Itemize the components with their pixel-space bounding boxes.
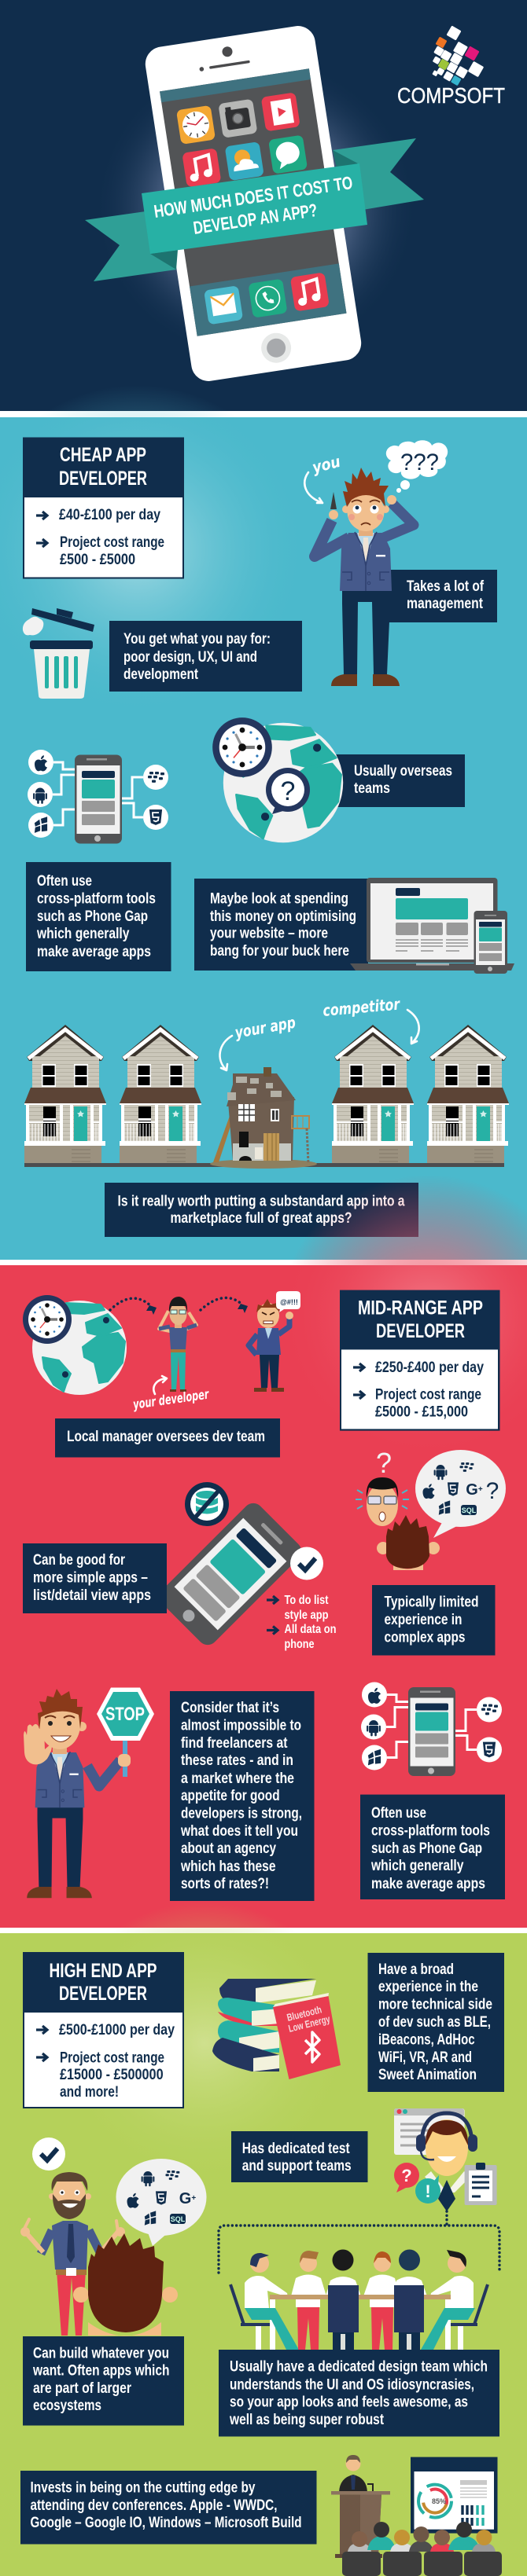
character: support agent <box>394 2108 497 2211</box>
logo: Compsoft: COMPSOFT <box>397 83 505 108</box>
icon: globe with clock and question: ? <box>281 776 295 806</box>
list: to do list style app: To do list <box>285 1594 329 1607</box>
callout: typically limited experience: complex apps <box>384 1628 466 1646</box>
heading <box>59 444 147 490</box>
callout: often use cross-platform tools: make average apps <box>37 943 151 960</box>
callout: can build whatever you want: are part of larger <box>33 2380 131 2397</box>
ribbon title text: DEVELOP AN APP? <box>192 200 319 238</box>
callout: typically limited experience <box>372 1585 496 1655</box>
ribbon title text <box>153 172 354 238</box>
icon: laptop and phone <box>350 878 514 974</box>
presentation screen: 85% <box>432 2497 446 2505</box>
rate list: £40-£100 per day <box>59 506 160 523</box>
callout: can build whatever you want: want. Often apps which <box>32 2361 170 2379</box>
callout: takes a lot of management: management <box>407 595 483 612</box>
callout: have a broad experience: more technical side <box>378 1996 492 2013</box>
callout: you get what you pay for <box>109 621 302 692</box>
callout: consider freelancer rates: developers is strong, <box>181 1804 302 1822</box>
callout: typically limited experience: Typically limited <box>384 1594 478 1611</box>
character: support agent: ? <box>401 2166 412 2185</box>
callout: often use cross-platform tools: such as Phone Gap <box>371 1840 482 1857</box>
ribbon banner <box>85 138 424 281</box>
dotted arrow to developer <box>110 1298 157 1315</box>
character: confused developer with speech bubble: ? <box>376 1447 392 1479</box>
callout: often use cross-platform tools: which generally <box>36 925 130 942</box>
raised hand <box>24 1724 52 1764</box>
callout: often use cross-platform tools: such as Phone Gap <box>37 908 148 925</box>
callout: typically limited experience: experience in <box>384 1611 463 1628</box>
callout: can be good for simple apps: list/detail view apps <box>33 1587 151 1604</box>
card: cheap app developer <box>23 437 184 578</box>
callout: local manager oversees dev team: Local manager oversees dev team <box>67 1428 265 1445</box>
hand lettering: your app <box>220 1013 297 1070</box>
callout: have a broad experience: Have a broad <box>378 1961 454 1978</box>
speech bubble with tech icons: SQL <box>171 2215 186 2223</box>
callout: invests in dev conferences <box>20 2471 316 2545</box>
logo: Compsoft <box>397 25 505 108</box>
list: to do list style app: style app <box>285 1609 329 1622</box>
callout: can build whatever you want <box>23 2336 184 2425</box>
callout: is it really worth <box>105 1183 418 1237</box>
callout: usually overseas teams: teams <box>354 780 390 797</box>
callout: often use cross-platform tools <box>360 1795 505 1899</box>
icon: smartphone illustration <box>143 24 363 383</box>
rate list: Project cost range <box>60 534 164 551</box>
callout: have a broad experience <box>368 1953 504 2092</box>
callout: consider freelancer rates: sorts of rates?! <box>181 1875 269 1892</box>
icon: trash can <box>23 608 94 699</box>
rate list: £500-£1000 per day <box>59 2021 175 2038</box>
callout: often use cross-platform tools: Often use <box>371 1804 426 1822</box>
speech bubble with tech icons: G <box>179 2190 191 2207</box>
panel: high end app developer section <box>0 1902 527 2576</box>
speech bubble with tech icons <box>116 2159 206 2246</box>
heading: DEVELOPER <box>59 1983 147 2005</box>
callout: consider freelancer rates: Consider that it’s <box>181 1699 279 1716</box>
speech bubble with tech icons: SQL <box>462 1506 477 1514</box>
callout: consider freelancer rates: appetite for good <box>181 1787 280 1804</box>
callout: is it really worth: marketplace full of great apps? <box>170 1209 352 1227</box>
callout: often use cross-platform tools: cross-platform tools <box>37 890 156 907</box>
card: mid-range app developer <box>340 1290 500 1431</box>
callout: maybe look at spending: bang for your buck here <box>210 942 349 960</box>
callout: consider freelancer rates: find freelancers at <box>181 1734 288 1752</box>
callout: dedicated test and support teams: Has dedicated test <box>242 2140 350 2157</box>
broken house <box>210 1067 317 1169</box>
character: support agent: ! <box>425 2182 431 2201</box>
book title text <box>286 2003 332 2035</box>
panel: mid-range app developer section <box>0 1175 527 1928</box>
hand lettering: your developer <box>132 1376 211 1413</box>
stop sign: STOP <box>105 1704 145 1725</box>
heading <box>49 1960 157 2005</box>
callout: maybe look at spending: Maybe look at spending <box>210 890 348 907</box>
callout: takes a lot of management <box>381 570 497 622</box>
speech bubble with tech icons <box>415 1450 506 1538</box>
icon: tilted phone <box>156 1499 305 1649</box>
callout: can build whatever you want: Can build whatever you <box>33 2344 169 2361</box>
callout: have a broad experience: of dev such as BLE, <box>378 2013 491 2031</box>
speech bubble with tech icons: G <box>466 1481 478 1499</box>
character: stop gesture <box>24 1688 154 1898</box>
callout: maybe look at spending: your website – more <box>210 925 328 942</box>
heading: DEVELOPER <box>376 1320 465 1342</box>
dotted arrow to manager <box>201 1297 248 1313</box>
panel: header <box>0 0 527 411</box>
rate list: £250-£400 per day <box>375 1359 484 1376</box>
rate list: £5000 - £15,000 <box>375 1404 468 1421</box>
audience <box>342 2522 502 2576</box>
panel: cheap app developer section <box>0 385 527 1260</box>
callout: can build whatever you want: ecosystems <box>33 2397 101 2414</box>
thought bubble <box>386 440 448 493</box>
list: to do list style app: All data on <box>285 1623 337 1636</box>
callout: often use cross-platform tools <box>26 862 171 971</box>
callout: have a broad experience: WiFi, VR, AR and <box>378 2049 472 2066</box>
speech bubble with tech icons: ? <box>486 1478 499 1504</box>
book title text: Low Energy <box>287 2013 332 2035</box>
icon: check badge <box>290 1547 323 1580</box>
card: high end app developer <box>23 1952 184 2108</box>
character: bearded developer with speech bubble <box>20 2137 206 2336</box>
callout: you get what you pay for: You get what you pay for: <box>123 630 271 648</box>
hand lettering: your developer: your developer <box>132 1386 211 1413</box>
speech bubble with tech icons: + <box>191 2194 196 2203</box>
callout: often use cross-platform tools: make average apps <box>371 1875 485 1892</box>
rate list <box>353 1359 484 1421</box>
callout: dedicated design team <box>219 2350 499 2436</box>
rate list: and more! <box>60 2083 119 2101</box>
heading: DEVELOPER <box>59 468 147 490</box>
illustration: conference <box>331 2455 502 2576</box>
callout: is it really worth: Is it really worth putting a substandard app into a <box>118 1193 405 1210</box>
heading: CHEAP APP <box>60 444 146 466</box>
rate list: £500 - £5000 <box>60 551 135 568</box>
character: confused developer with speech bubble <box>356 1447 506 1570</box>
callout: invests in dev conferences: Invests in being on the cutting edge by <box>30 2479 256 2496</box>
callout: you get what you pay for: poor design, UX, UI and <box>123 648 257 666</box>
icon: globe with clock <box>23 1295 127 1395</box>
callout: have a broad experience: experience in the <box>378 1978 478 1995</box>
callout: can be good for simple apps: more simple apps – <box>33 1569 148 1587</box>
callout: you get what you pay for: development <box>123 666 198 683</box>
icon: cross-platform phone <box>28 750 168 844</box>
icon: globe with clock and question <box>212 717 343 842</box>
icon: no database <box>185 1482 229 1526</box>
heading <box>358 1297 483 1342</box>
callout: consider freelancer rates <box>170 1691 315 1901</box>
callout: invests in dev conferences: attending dev conferences. Apple - WWDC, <box>30 2497 277 2514</box>
hand lettering: competitor: competitor <box>322 994 401 1020</box>
callout: can be good for simple apps: Can be good for <box>33 1551 125 1569</box>
illustration: design team at table <box>230 2249 488 2350</box>
character: you <box>304 440 448 686</box>
callout: often use cross-platform tools: cross-platform tools <box>371 1822 490 1839</box>
thought bubble: ??? <box>400 450 439 475</box>
callout: consider freelancer rates: what does it tell you <box>180 1822 298 1840</box>
rate list <box>36 506 164 568</box>
presenter at podium <box>331 2455 390 2558</box>
callout: invests in dev conferences: Google – Google IO, Windows – Microsoft Build <box>30 2514 302 2531</box>
callout: often use cross-platform tools: which generally <box>370 1857 464 1874</box>
book title text: Bluetooth <box>286 2003 322 2024</box>
list: to do list style app <box>267 1594 337 1651</box>
stop sign <box>97 1688 154 1777</box>
callout: dedicated test and support teams <box>231 2131 368 2182</box>
character: you: you <box>310 452 342 477</box>
dotted connector bracket <box>219 2211 499 2273</box>
callout: usually overseas teams <box>334 754 465 807</box>
presentation screen <box>411 2457 497 2534</box>
callout: can be good for simple apps <box>23 1543 167 1613</box>
callout: consider freelancer rates: about an agency <box>181 1840 276 1857</box>
rate list: Project cost range <box>60 2049 164 2067</box>
character: your developer <box>159 1297 197 1392</box>
callout: maybe look at spending <box>194 879 368 971</box>
callout: consider freelancer rates: a market where the <box>181 1770 294 1787</box>
character: angry manager: @#!!! <box>280 1298 298 1306</box>
heading: MID-RANGE APP <box>358 1297 483 1319</box>
ribbon title text: HOW MUCH DOES IT COST TO <box>153 172 354 222</box>
rate list <box>36 2021 175 2101</box>
icon: stack of books <box>212 1979 341 2079</box>
callout: local manager oversees dev team <box>55 1418 280 1457</box>
callout: consider freelancer rates: these rates - and in <box>181 1752 293 1769</box>
heading: HIGH END APP <box>49 1960 157 1982</box>
callout: have a broad experience: Sweet Animation <box>378 2066 477 2083</box>
list: to do list style app: phone <box>285 1638 315 1651</box>
hand lettering: your app: your app <box>234 1013 297 1042</box>
callout: usually overseas teams: Usually overseas <box>354 762 452 780</box>
back of viewer's head <box>73 2233 178 2336</box>
callout: maybe look at spending: this money on optimising <box>210 908 356 925</box>
callout: dedicated design team: so your app looks and feels awesome, as <box>230 2394 468 2411</box>
callout: consider freelancer rates: almost impossible to <box>181 1717 301 1734</box>
character: angry manager <box>249 1291 300 1392</box>
callout: often use cross-platform tools: Often use <box>37 872 92 890</box>
rate list: £15000 - £500000 <box>60 2066 164 2083</box>
speech bubble with tech icons: + <box>478 1485 483 1494</box>
icon: cross-platform phone <box>361 1682 502 1776</box>
callout: dedicated design team: well as being super robust <box>229 2411 384 2428</box>
callout: have a broad experience: iBeacons, AdHoc <box>378 2031 475 2048</box>
hand lettering: competitor <box>322 994 419 1044</box>
callout: takes a lot of management: Takes a lot of <box>407 578 484 595</box>
callout: consider freelancer rates: which has these <box>180 1858 276 1875</box>
callout: dedicated test and support teams: and support teams <box>242 2157 352 2174</box>
illustration: street of houses <box>24 994 509 1169</box>
rate list: Project cost range <box>375 1385 481 1403</box>
